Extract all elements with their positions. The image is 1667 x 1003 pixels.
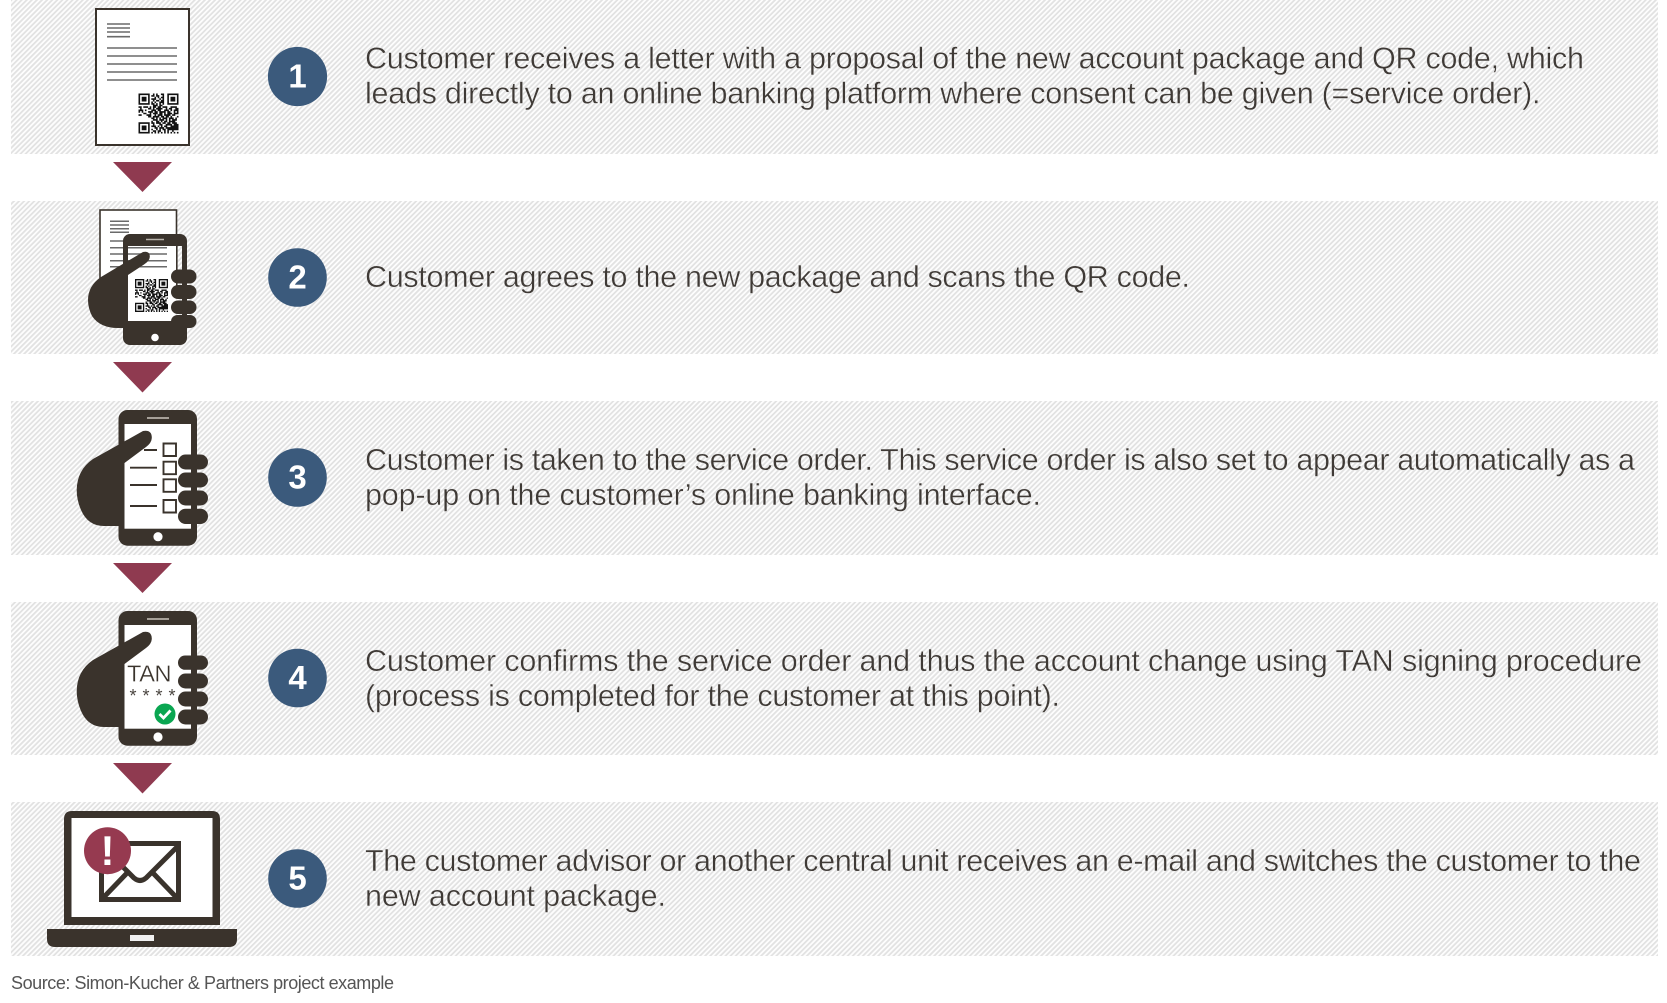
panel: step 3 — [11, 401, 1658, 555]
icon: hand holding phone with checklist — [77, 410, 208, 546]
step number 3: 3 — [288, 458, 307, 496]
icon: hand holding phone with TAN confirmation: TAN — [127, 661, 172, 687]
icon: hand holding phone with TAN confirmation: * — [142, 686, 150, 706]
step 5 text: The customer advisor or another central unit receives an e-mail and switches the customer to the — [365, 844, 1641, 878]
step number 4: 4 — [288, 659, 307, 696]
arrow: step 4 to 5 — [113, 763, 172, 794]
icon: hand holding phone with TAN confirmation — [77, 611, 208, 746]
step number 3 — [268, 448, 327, 507]
step 1 text — [365, 42, 1584, 110]
step number 2: 2 — [288, 258, 307, 296]
icon: hand holding phone with TAN confirmation: * — [129, 686, 137, 706]
icon: hand holding phone with TAN confirmation: * — [155, 686, 163, 706]
icon: hand holding phone with TAN confirmation: * — [168, 686, 176, 706]
step 4 text — [365, 644, 1642, 713]
step number 2 — [268, 248, 327, 307]
step 3 text: Customer is taken to the service order. This service order is also set to appear automatically as a — [365, 443, 1635, 477]
step number 4 — [268, 649, 327, 707]
arrow: step 2 to 3 — [113, 362, 172, 392]
step 2 text: Customer agrees to the new package and scans the QR code. — [365, 260, 1190, 294]
step number 5 — [268, 849, 327, 908]
step 3 text — [365, 443, 1635, 512]
icon: letter with QR code — [96, 9, 189, 145]
panel: step 2 — [11, 201, 1658, 354]
step 5 text: new account package. — [365, 879, 666, 913]
step number 5: 5 — [288, 860, 307, 896]
step number 1: 1 — [288, 58, 307, 94]
step number 1 — [268, 47, 327, 106]
icon: hand scanning QR code with phone — [88, 210, 196, 345]
step 3 text: pop-up on the customer’s online banking interface. — [365, 478, 1041, 512]
arrow: step 3 to 4 — [113, 563, 172, 593]
step 1 text: Customer receives a letter with a proposal of the new account package and QR code, which — [365, 42, 1584, 76]
panel: step 4 — [11, 602, 1658, 755]
step 4 text: Customer confirms the service order and thus the account change using TAN signing procedure — [365, 644, 1642, 678]
step 4 text: (process is completed for the customer at this point). — [365, 679, 1060, 713]
icon: laptop with e-mail alert — [47, 811, 237, 947]
step 5 text — [365, 844, 1641, 913]
step 1 text: leads directly to an online banking platform where consent can be given (=service order). — [365, 76, 1540, 110]
arrow: step 1 to 2 — [113, 162, 172, 192]
panel: step 1 — [11, 0, 1658, 154]
panel: step 5 — [11, 802, 1658, 956]
icon: laptop with e-mail alert: ! — [100, 827, 114, 874]
source note: Source: Simon-Kucher & Partners project example — [11, 973, 394, 993]
